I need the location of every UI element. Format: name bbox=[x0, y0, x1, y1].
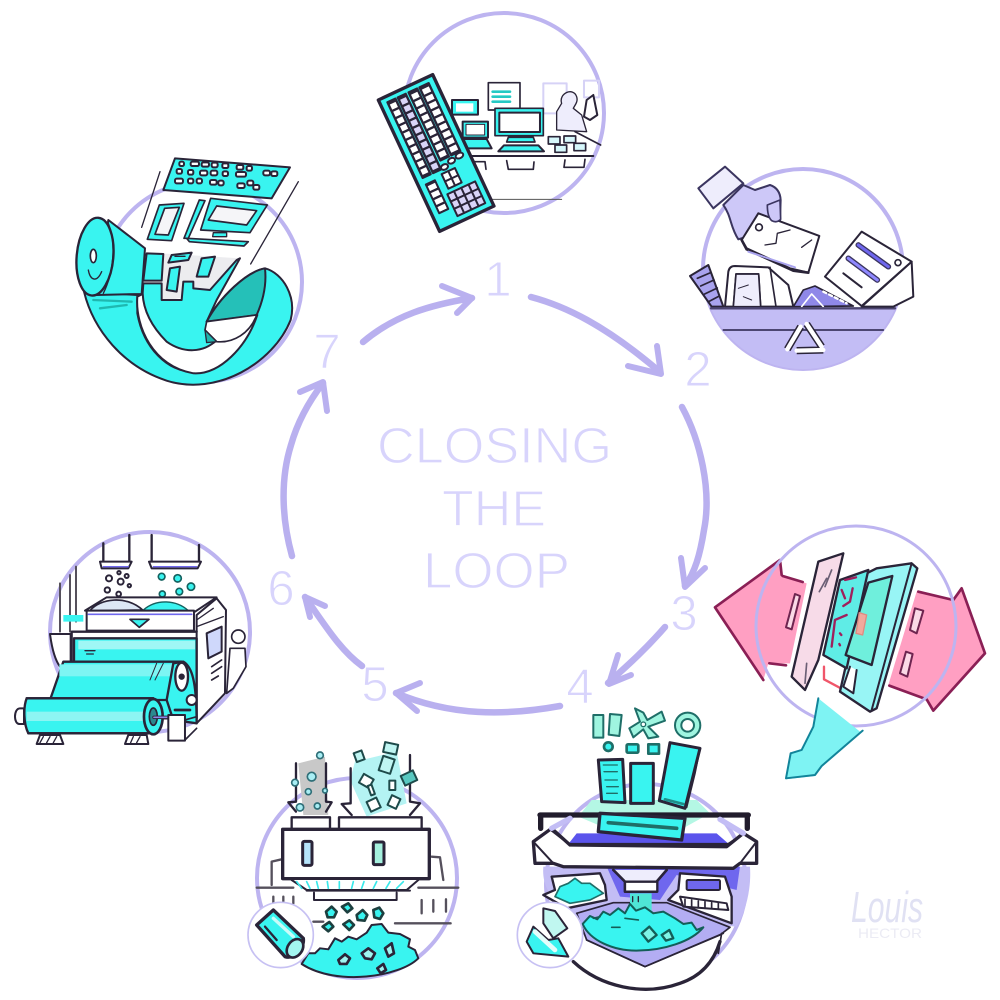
step numbers: 4 bbox=[566, 660, 594, 714]
step numbers: 3 bbox=[670, 587, 698, 641]
neck bbox=[613, 870, 667, 892]
left pink arrow bbox=[715, 560, 807, 680]
teal board bbox=[846, 576, 892, 665]
step numbers: 1 bbox=[484, 253, 512, 307]
step 3: disassembly illustration bbox=[715, 526, 985, 779]
step 6: sheet extrusion machine illustration bbox=[15, 532, 250, 744]
keyboard bbox=[378, 75, 494, 231]
left tank bbox=[60, 567, 76, 632]
circle bbox=[756, 526, 956, 726]
arrow: 2 to 3 bbox=[681, 407, 707, 587]
step 2: collection bin illustration bbox=[690, 167, 913, 369]
film roll scene bbox=[73, 158, 298, 385]
mint funnel bbox=[578, 800, 710, 847]
sticky notes bbox=[548, 136, 586, 152]
arrow: 3 to 4 bbox=[608, 627, 665, 684]
pale pink panel bbox=[792, 553, 843, 690]
motion lines bbox=[142, 172, 298, 264]
step numbers: 6 bbox=[267, 562, 295, 616]
tablet and casing bbox=[862, 262, 913, 307]
monitor bbox=[495, 108, 543, 136]
step numbers: 2 bbox=[684, 343, 712, 397]
circle bbox=[703, 169, 903, 369]
arrow: 7 to 1 bbox=[363, 286, 472, 342]
white base bbox=[573, 940, 720, 988]
step numbers bbox=[267, 253, 712, 714]
colour washes bbox=[298, 757, 328, 815]
cyan inner sheet bbox=[143, 258, 240, 350]
heading: closing the loop: THE bbox=[442, 480, 546, 537]
hoppers bbox=[103, 535, 199, 562]
phone bbox=[742, 213, 819, 273]
feed box bbox=[598, 813, 685, 840]
tablet bbox=[452, 100, 478, 115]
finger bbox=[767, 200, 781, 222]
machine backdrop bbox=[543, 867, 750, 927]
roll cone bbox=[97, 220, 145, 295]
red frame bbox=[824, 667, 857, 695]
basin cyan contents bbox=[583, 904, 703, 951]
arrow: 6 to 7 bbox=[284, 382, 327, 556]
logo: Louis Hector bbox=[851, 883, 923, 941]
exploded casing parts bbox=[786, 553, 917, 779]
roll end bbox=[73, 216, 117, 297]
side box right bbox=[668, 873, 732, 923]
right pink arrow bbox=[888, 588, 985, 711]
arrow: 1 to 2 bbox=[531, 297, 661, 374]
rear body bbox=[840, 563, 917, 712]
roller machine scene bbox=[15, 535, 246, 744]
necks bbox=[292, 817, 422, 828]
flakes bbox=[354, 742, 417, 812]
hand bbox=[723, 185, 781, 239]
logo: Louis Hector: Louis bbox=[851, 883, 923, 932]
operator bbox=[232, 630, 245, 643]
bin bbox=[711, 308, 895, 369]
bin scene bbox=[690, 167, 913, 369]
logo: Louis Hector: HECTOR bbox=[858, 925, 922, 941]
hopper hexagon bbox=[533, 828, 757, 868]
old devices bbox=[690, 265, 723, 307]
upper roll sheet bbox=[50, 662, 182, 700]
parts bbox=[598, 759, 625, 803]
desk bbox=[470, 153, 593, 159]
pellets bbox=[105, 571, 131, 603]
inset circle bbox=[517, 902, 583, 968]
pellet pile bbox=[302, 924, 418, 977]
heading: closing the loop: CLOSING bbox=[377, 417, 612, 474]
circle bbox=[404, 13, 604, 213]
machine side bbox=[197, 598, 226, 723]
machine body bbox=[72, 632, 197, 663]
pink arrows bbox=[715, 560, 985, 711]
side box left bbox=[543, 873, 607, 908]
heading: closing the loop bbox=[377, 417, 612, 599]
machine box bbox=[283, 829, 429, 879]
circle bbox=[102, 182, 302, 382]
step 5: extruder illustration bbox=[248, 742, 458, 978]
side frame and wheel bbox=[167, 662, 197, 723]
outer ribbon bbox=[84, 268, 292, 385]
circle bbox=[257, 778, 457, 978]
step 4: shredder illustration bbox=[517, 708, 757, 989]
step numbers: 7 bbox=[313, 325, 341, 379]
grey sheet behind cutouts bbox=[162, 253, 240, 302]
laptop bbox=[463, 122, 488, 138]
circle bbox=[546, 784, 746, 984]
cycle arrows bbox=[284, 286, 707, 712]
document bbox=[488, 83, 520, 110]
teal underside bbox=[207, 268, 265, 322]
circle bbox=[50, 532, 250, 732]
blue tray bbox=[568, 833, 730, 845]
desk scene and keyboard bbox=[378, 75, 601, 231]
printed screens bbox=[147, 203, 184, 241]
white inner band bbox=[137, 294, 257, 373]
cuff bbox=[698, 167, 743, 208]
basin bbox=[577, 903, 730, 967]
step numbers: 5 bbox=[361, 658, 389, 712]
grey pellets bbox=[292, 752, 327, 811]
cyan circuit board bbox=[823, 570, 868, 668]
base bbox=[573, 942, 720, 989]
feet bbox=[37, 735, 148, 744]
top sorted pieces bbox=[593, 708, 700, 754]
printed keyboard panel bbox=[163, 158, 290, 198]
falling pellets bbox=[323, 903, 383, 931]
falling stream bbox=[630, 893, 652, 913]
recycle symbol bbox=[787, 324, 823, 351]
post bbox=[168, 715, 185, 741]
arrow: 4 to 5 bbox=[396, 683, 560, 712]
background building lines bbox=[257, 857, 458, 888]
hopper bbox=[85, 597, 217, 612]
heading: closing the loop: LOOP bbox=[423, 542, 570, 599]
inset circle bbox=[248, 902, 313, 968]
sheet cutouts bbox=[143, 253, 163, 281]
step 7: printed film roll illustration bbox=[73, 158, 302, 385]
shredder scene bbox=[517, 708, 757, 989]
front roller bbox=[24, 698, 153, 733]
down arrow bbox=[786, 698, 860, 779]
person bbox=[543, 81, 599, 113]
machine top frame bbox=[540, 815, 748, 828]
bin rim bbox=[711, 305, 895, 312]
extruder scene bbox=[248, 742, 458, 977]
die bbox=[292, 880, 418, 890]
arrow: 5 to 6 bbox=[305, 597, 362, 666]
pipes bbox=[288, 763, 332, 812]
step 1: design illustration bbox=[378, 13, 604, 231]
